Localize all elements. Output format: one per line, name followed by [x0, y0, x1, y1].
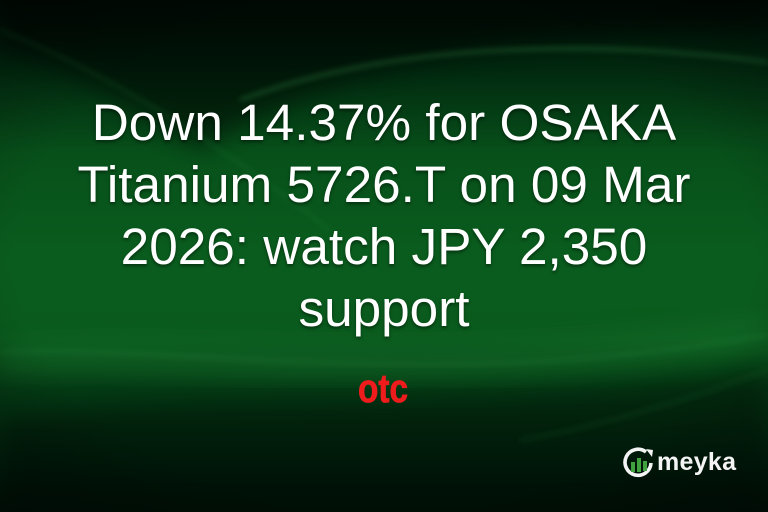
title	[77, 94, 691, 340]
meyka logo	[623, 447, 736, 478]
title: 2026: watch JPY 2,350	[121, 218, 647, 275]
title: support	[298, 280, 470, 337]
title: Titanium 5726.T on 09 Mar	[77, 156, 691, 213]
icon: meyka gauge	[623, 447, 653, 478]
title: Down 14.37% for OSAKA	[92, 94, 676, 151]
icon: otc logo: otc	[358, 367, 408, 411]
brand name: meyka	[657, 448, 736, 476]
